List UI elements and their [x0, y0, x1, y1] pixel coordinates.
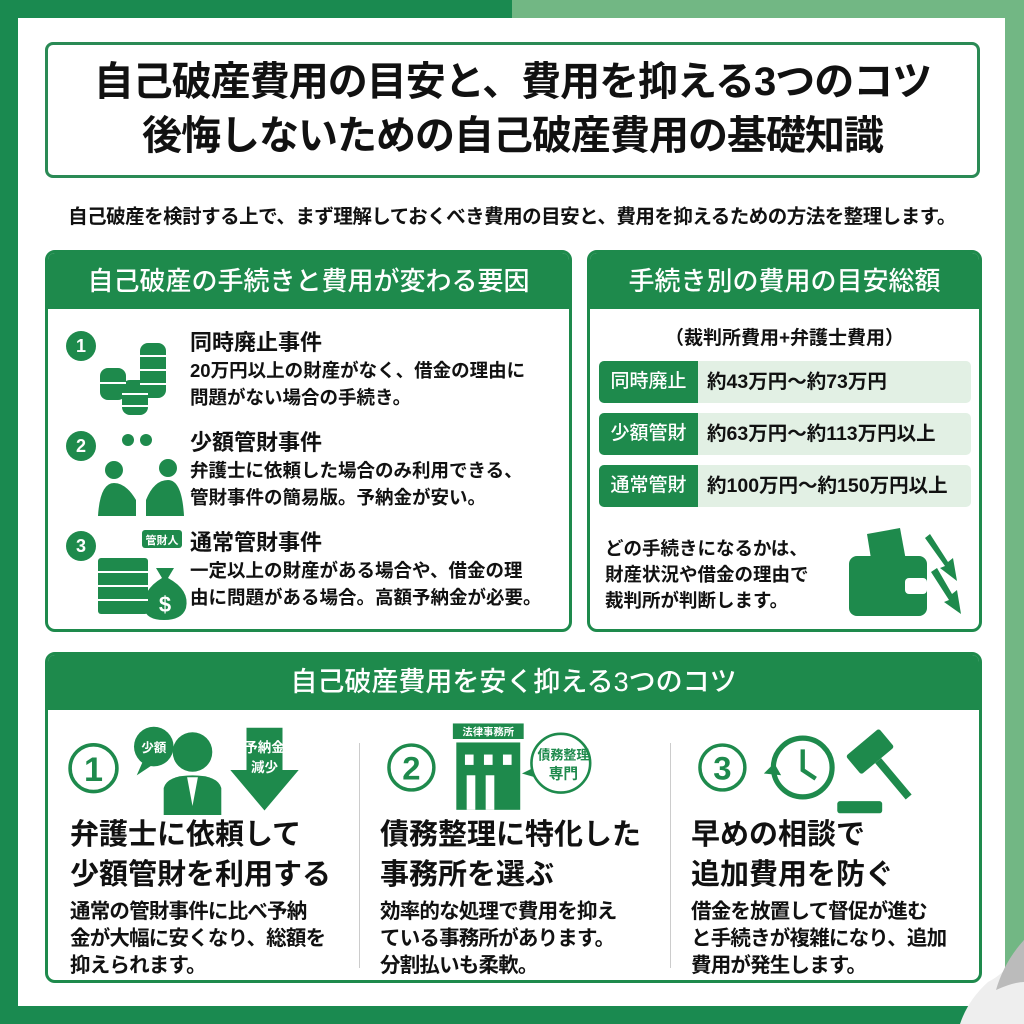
row 少額管財: 約63万円〜約113万円以上: [707, 423, 936, 445]
tip 2: 効率的な処理で費用を抑え: [380, 900, 616, 923]
row 通常管財: 約100万円〜約150万円以上: [707, 475, 948, 497]
panel heading: [48, 655, 979, 710]
row 通常管財: [599, 465, 971, 507]
panel heading: [590, 253, 979, 309]
panel heading: 自己破産の手続きと費用が変わる要因: [87, 266, 530, 296]
panel: 3 tips: [45, 652, 982, 983]
item 2: 2: [76, 436, 86, 456]
tip 2: 債務整理に特化した: [380, 819, 641, 851]
row 通常管財: 通常管財: [610, 475, 686, 496]
note text: [605, 538, 809, 611]
item 1: 20万円以上の財産がなく、借金の理由に: [190, 360, 525, 381]
item 1: 1: [76, 336, 86, 356]
row 少額管財: [599, 413, 971, 455]
row 同時廃止: 同時廃止: [610, 371, 686, 392]
tip 3: 早めの相談で: [691, 819, 865, 851]
tip 1: 通常の管財事件に比べ予納: [70, 900, 306, 923]
tip 1: 抑えられます。: [70, 954, 206, 977]
tip 3: 追加費用を防ぐ: [691, 859, 894, 891]
title: 後悔しないための自己破産費用の基礎知識: [142, 114, 883, 158]
tip 2: ている事務所があります。: [380, 927, 614, 950]
note text: 財産状況や借金の理由で: [605, 564, 809, 585]
panel heading: [48, 253, 569, 309]
icon: wallet: [849, 528, 961, 616]
tip 3: 費用が発生します。: [691, 954, 866, 977]
icon: clock + gavel: [698, 730, 912, 814]
item 2: 弁護士に依頼した場合のみ利用できる、: [190, 460, 523, 481]
tip 3: [691, 730, 946, 977]
item 1: [66, 330, 525, 415]
tip 2: 分割払いも柔軟。: [380, 954, 538, 977]
page curl: [960, 940, 1024, 1024]
icon: lawyer + arrow: 少額: [141, 737, 167, 756]
icon: lawyer + arrow: 予納金: [244, 736, 285, 756]
tip 1: 弁護士に依頼して: [70, 819, 301, 851]
tip 2: [380, 723, 641, 977]
panel: cost totals: [587, 250, 982, 632]
row 同時廃止: [599, 361, 971, 403]
item 2: 管財事件の簡易版。予納金が安い。: [190, 487, 486, 508]
item 3: 一定以上の財産がある場合や、借金の理: [190, 560, 522, 581]
item 2: 少額管財事件: [190, 430, 322, 455]
icon: law office: 専門: [549, 763, 578, 784]
item 3: [66, 530, 542, 620]
icon: law office: 法律事務所: [462, 724, 515, 739]
panel heading: 手続き別の費用の目安総額: [628, 266, 940, 296]
icon: lawyer + arrow: 減少: [251, 756, 278, 776]
note text: どの手続きになるかは、: [605, 538, 808, 559]
title: [45, 42, 980, 178]
panel heading: 自己破産費用を安く抑える3つのコツ: [290, 667, 737, 697]
icon: lawyer + arrow: 1: [84, 751, 103, 789]
tip 1: [68, 726, 331, 977]
item 3: 通常管財事件: [190, 530, 322, 555]
item 2: [66, 430, 523, 516]
title: 自己破産費用の目安と、費用を抑える3つのコツ: [94, 60, 931, 104]
item 3: 3: [76, 536, 86, 556]
icon: law office: 2: [402, 750, 421, 787]
tip 3: 借金を放置して督促が進む: [691, 900, 927, 923]
tip 2: 事務所を選ぶ: [380, 859, 554, 891]
item 3: 由に問題がある場合。高額予納金が必要。: [190, 587, 542, 608]
icon: law office: 債務整理: [538, 745, 589, 764]
tip 3: と手続きが複雑になり、追加: [691, 927, 946, 950]
icon: clock + gavel: 3: [713, 750, 732, 787]
note: （裁判所費用+弁護士費用）: [665, 328, 904, 349]
note text: 裁判所が判断します。: [605, 590, 788, 611]
row 同時廃止: 約43万円〜約73万円: [707, 371, 887, 393]
item 3: $: [159, 592, 171, 617]
item 1: 問題がない場合の手続き。: [190, 387, 411, 408]
subtitle: 自己破産を検討する上で、まず理解しておくべき費用の目安と、費用を抑えるための方法を整理します。: [68, 206, 956, 228]
icon: law office: [387, 723, 592, 810]
row 少額管財: 少額管財: [610, 423, 686, 444]
icon: lawyer + arrow: [68, 726, 299, 815]
item 3: 管財人: [146, 532, 178, 548]
item 1: 同時廃止事件: [190, 330, 322, 355]
panel: factors: [45, 250, 572, 632]
tip 1: 少額管財を利用する: [70, 859, 331, 891]
tip 1: 金が大幅に安くなり、総額を: [70, 927, 325, 950]
